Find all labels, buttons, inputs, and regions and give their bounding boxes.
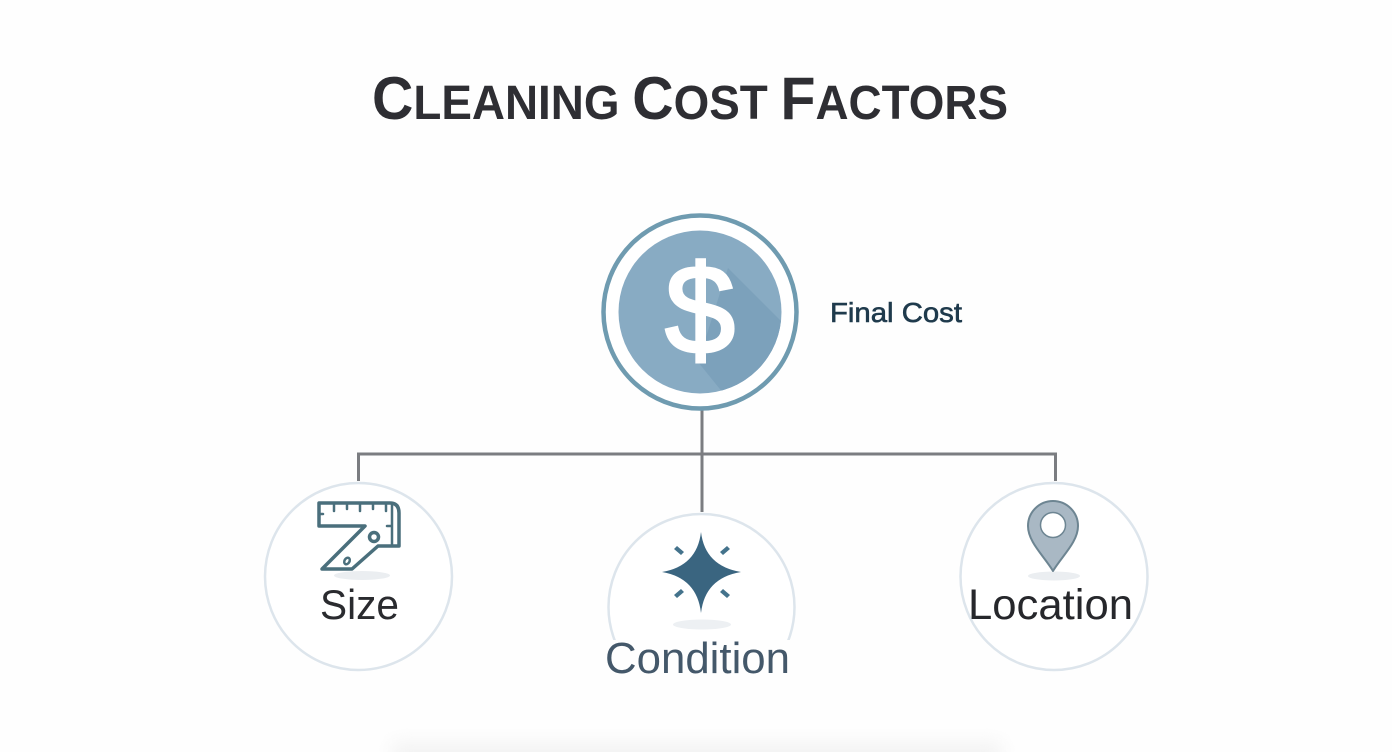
factor: location — [960, 483, 1148, 670]
title: CLEANING COST FACTORS — [372, 65, 1008, 132]
icon: sparkle — [662, 532, 741, 613]
condition label backing — [600, 640, 800, 706]
condition label: Condition — [605, 634, 790, 683]
connector lines — [358, 410, 1056, 512]
size label: Size — [320, 581, 399, 628]
icon: ruler — [319, 503, 399, 569]
location icon shadow — [1028, 572, 1080, 580]
condition circle — [608, 514, 794, 700]
outer ring — [604, 216, 796, 408]
condition icon shadow — [673, 620, 731, 630]
icon: dollar sign: $ — [665, 239, 735, 380]
size icon shadow — [334, 571, 390, 580]
icon: map pin — [1028, 501, 1078, 571]
final cost node — [604, 216, 796, 420]
location label: Location — [968, 581, 1133, 629]
final cost label: Final Cost — [830, 297, 962, 328]
size circle — [265, 483, 452, 670]
location circle — [960, 483, 1148, 670]
disc shadow — [700, 268, 781, 390]
factor: condition — [600, 514, 800, 706]
factor: size — [265, 483, 452, 670]
inner disc — [618, 230, 782, 394]
